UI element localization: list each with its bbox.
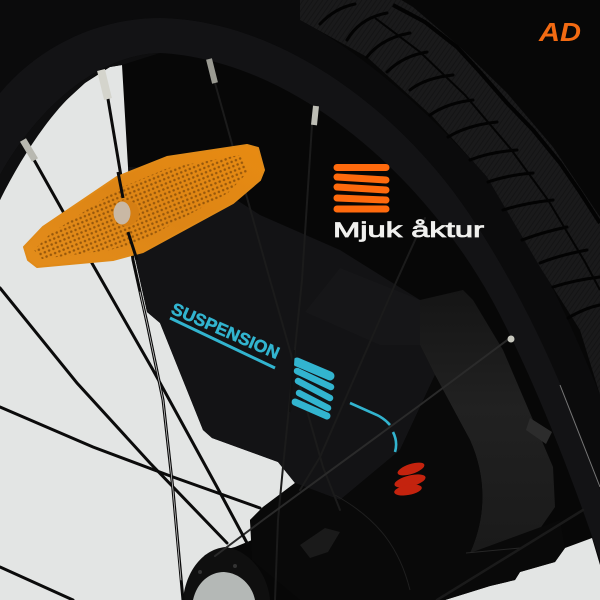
fender: dark panel <box>128 167 555 553</box>
reflector <box>24 145 264 267</box>
spoke group: over the dark area <box>215 83 583 600</box>
label: SUSPENSION: SUSPENSION <box>168 299 282 363</box>
reflector mount <box>113 200 139 226</box>
reflector spoke <box>118 172 137 260</box>
background: left light area <box>0 65 295 600</box>
cyan spring icon <box>295 362 331 416</box>
rim highlight line <box>560 385 600 487</box>
logo: AD: AD <box>538 17 581 47</box>
lower bracket and suspension housing <box>250 375 565 600</box>
heading: Mjuk åktur: Mjuk åktur <box>333 219 484 242</box>
tyre tread <box>300 0 600 395</box>
orange spring icon <box>337 168 386 209</box>
spoke over cyan icon <box>290 350 294 412</box>
valve <box>526 418 552 444</box>
background: bottom right light area <box>445 538 600 600</box>
fender: lighter curved guard <box>420 290 555 553</box>
spoke group: over the light area <box>0 99 260 600</box>
hub <box>183 547 270 600</box>
cyan connector line <box>350 403 396 452</box>
red shock spring <box>393 460 427 497</box>
spoke nipples <box>23 59 514 342</box>
